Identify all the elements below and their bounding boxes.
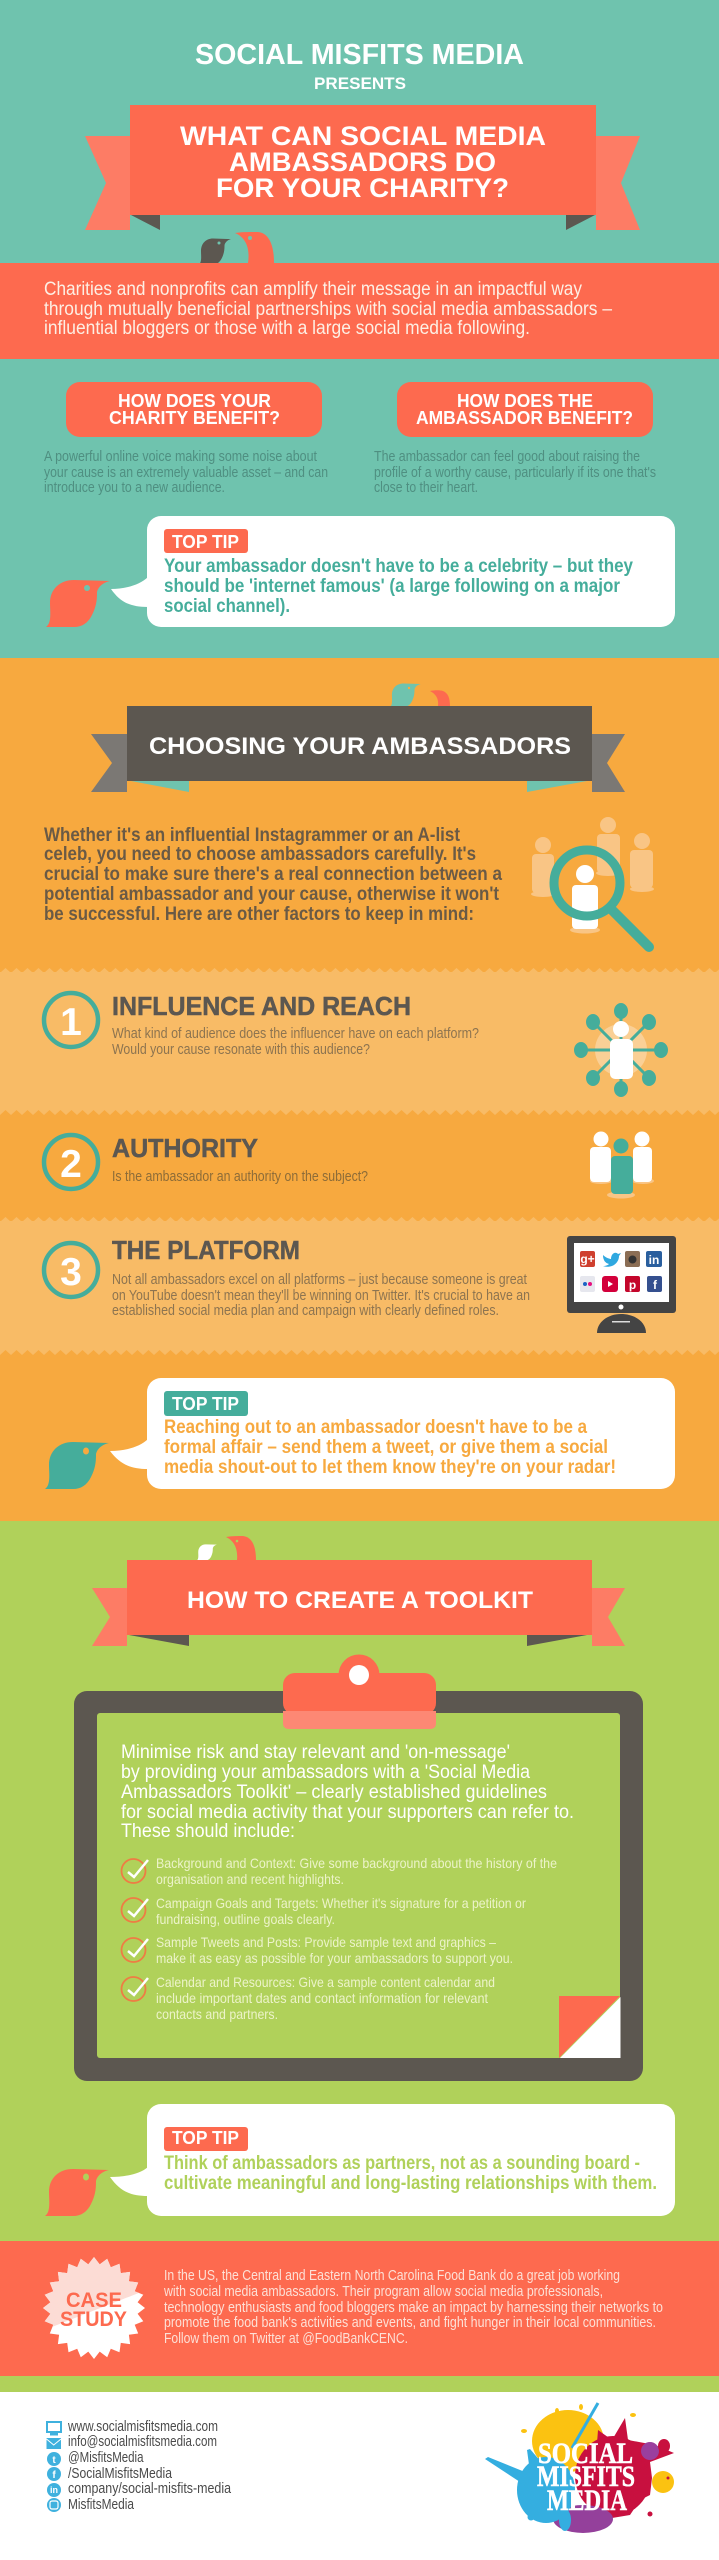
header brand name xyxy=(195,39,524,93)
icon: three people xyxy=(590,1132,654,1198)
text: the platform: established social media plan and campaign with clearly defined roles. xyxy=(112,1303,499,1319)
icon: perched birds xyxy=(199,232,274,264)
text: influence and reach xyxy=(112,1026,479,1058)
header brand name: PRESENTS xyxy=(314,74,406,93)
section ribbon: HOW TO CREATE A TOOLKIT xyxy=(187,1587,533,1614)
icon: social circles: t xyxy=(52,2455,56,2466)
text: authority: Is the ambassador an authority on the subject? xyxy=(112,1169,368,1185)
text block: toolkit intro: These should include: xyxy=(121,1821,295,1842)
icon: social circles: in xyxy=(50,2485,58,2495)
text block: toolkit intro xyxy=(121,1742,574,1842)
case study seal xyxy=(43,2257,145,2359)
text block: choosing intro: potential ambassador and your cause, otherwise it won't xyxy=(44,884,500,905)
contact list xyxy=(46,2419,232,2513)
text block: case study: In the US, the Central and Eastern North Carolina Food Bank do a great job working xyxy=(164,2268,620,2284)
checklist item: background and context: Background and Context: Give some background about the history of the xyxy=(156,1855,557,1871)
icon: monitor with social networks: p xyxy=(629,1278,636,1292)
checklist item: calendar and resources: contacts and partners. xyxy=(156,2006,278,2022)
panel: intro teal section xyxy=(0,0,719,658)
contact text: www.socialmisfitsmedia.com xyxy=(67,2419,218,2435)
row: influence and reach xyxy=(0,968,719,1115)
heading pill: charity benefit: CHARITY BENEFIT? xyxy=(109,408,280,428)
callout: top tip 3: cultivate meaningful and long-lasting relationships with them. xyxy=(164,2173,657,2194)
callout: top tip 3: TOP TIP xyxy=(172,2128,239,2148)
title ribbon xyxy=(85,105,640,230)
contact text: info@socialmisfitsmedia.com xyxy=(68,2434,217,2450)
icon: monitor with social networks: in xyxy=(649,1253,659,1267)
contact text: @MisfitsMedia xyxy=(68,2450,144,2466)
contact text xyxy=(67,2419,232,2513)
contact text: company/social-misfits-media xyxy=(68,2481,232,2497)
checklist item: calendar and resources: Calendar and Resources: Give a sample content calendar and xyxy=(156,1974,495,1990)
text block: choosing intro: celeb, you need to choose ambassadors carefully. It's xyxy=(44,844,476,865)
checklist item: sample tweets xyxy=(122,1934,513,1966)
contact text: /SocialMisfitsMedia xyxy=(68,2466,173,2482)
logo: social misfits media splat: MISFITS xyxy=(537,2460,635,2493)
icon: network person xyxy=(574,1003,668,1097)
callout: top tip 2: TOP TIP xyxy=(172,1394,239,1414)
text block: toolkit intro: Minimise risk and stay relevant and 'on-message' xyxy=(121,1742,510,1763)
checklist item: campaign goals: fundraising, outline goals clearly. xyxy=(156,1911,335,1927)
callout: top tip 3 xyxy=(45,2104,675,2216)
checklist item: campaign goals: Campaign Goals and Targets: Whether it's signature for a petition or xyxy=(156,1895,526,1911)
text block: ambassador benefit: profile of a worthy cause, particularly if its one that's xyxy=(374,465,656,481)
number badge 2 xyxy=(44,1135,98,1189)
text block: case study xyxy=(163,2268,663,2347)
callout: top tip 1: TOP TIP xyxy=(172,532,239,552)
callout: top tip 2: Reaching out to an ambassador doesn't have to be a xyxy=(164,1417,587,1438)
number badge 2: 2 xyxy=(60,1143,82,1186)
text block: ambassador benefit: The ambassador can feel good about raising the xyxy=(374,449,640,465)
number badge 3: 3 xyxy=(60,1251,82,1294)
icon: monitor xyxy=(47,2422,61,2436)
text block: toolkit intro: Ambassadors Toolkit' – clearly established guidelines xyxy=(121,1782,547,1803)
checklist item: sample tweets: Sample Tweets and Posts: Provide sample text and graphics – xyxy=(156,1934,496,1950)
number badge 1: 1 xyxy=(60,1001,82,1044)
callout: top tip 1 xyxy=(46,516,675,627)
checklist item: calendar and resources: include important dates and contact information for relevant xyxy=(156,1990,488,2006)
case study seal: STUDY xyxy=(60,2308,127,2331)
number badge 1 xyxy=(44,993,98,1047)
row: authority xyxy=(44,1132,654,1198)
text block: charity benefit xyxy=(44,449,328,496)
callout: top tip 2: formal affair – send them a tweet, or give them a social xyxy=(164,1437,608,1458)
page corner fold xyxy=(559,1996,620,2058)
panel: footer xyxy=(0,2392,719,2560)
contact text: MisfitsMedia xyxy=(68,2497,135,2513)
callout: top tip 1: social channel). xyxy=(164,596,290,617)
text: influence and reach: What kind of audience does the influencer have on each platform? xyxy=(112,1026,479,1042)
icon: monitor with social networks xyxy=(567,1236,676,1333)
icon: monitor with social networks: f xyxy=(653,1278,658,1292)
checklist item: background and context xyxy=(122,1855,557,1887)
case study seal: CASE xyxy=(66,2289,122,2312)
text block: case study: Follow them on Twitter at @FoodBankCENC. xyxy=(164,2331,408,2347)
heading pill: ambassador benefit xyxy=(397,382,653,437)
heading: authority: AUTHORITY xyxy=(112,1133,258,1163)
callout: top tip 2 xyxy=(45,1378,675,1489)
number badge 3 xyxy=(44,1243,98,1297)
text block: charity benefit: A powerful online voice making some noise about xyxy=(44,449,317,465)
text block: choosing intro xyxy=(44,825,502,925)
intro text band: through mutually beneficial partnerships with social media ambassadors – xyxy=(44,299,612,320)
checklist item: sample tweets: make it as easy as possible for your ambassadors to support you. xyxy=(156,1950,513,1966)
logo: social misfits media splat xyxy=(485,2403,674,2533)
logo: social misfits media splat: SOCIAL xyxy=(538,2437,633,2470)
icon: perched birds xyxy=(390,684,450,707)
callout: top tip 2: media shout-out to let them know they're on your radar! xyxy=(164,1457,616,1478)
text: the platform xyxy=(112,1272,530,1319)
intro text band xyxy=(0,263,719,359)
text: the platform: Not all ambassadors excel on all platforms – just because someone is great xyxy=(112,1272,527,1288)
logo: social misfits media splat: MEDIA xyxy=(547,2484,627,2517)
panel: choosing your ambassadors xyxy=(0,658,719,2560)
callout: top tip 1: Your ambassador doesn't have to be a celebrity – but they xyxy=(164,556,633,577)
clipboard xyxy=(74,1654,643,2081)
heading pill: charity benefit xyxy=(66,382,322,437)
section ribbon xyxy=(92,1560,625,1646)
row: the platform xyxy=(0,1217,719,1489)
section ribbon xyxy=(91,706,625,792)
text block: charity benefit: introduce you to a new audience. xyxy=(44,480,225,496)
panel: case study xyxy=(0,2241,719,2376)
title ribbon: WHAT CAN SOCIAL MEDIA xyxy=(180,121,546,151)
callout: top tip 3: Think of ambassadors as partners, not as a sounding board - xyxy=(164,2153,640,2174)
title ribbon: FOR YOUR CHARITY? xyxy=(216,173,509,203)
text block: choosing intro: crucial to make sure there's a real connection between a xyxy=(44,864,502,885)
icon: perched birds xyxy=(197,1536,256,1560)
text block: toolkit intro: by providing your ambassadors with a 'Social Media xyxy=(121,1762,530,1783)
checklist item: calendar and resources xyxy=(122,1974,495,2022)
text block: case study: with social media ambassadors. Their program allow social media professionals, xyxy=(163,2284,603,2300)
section ribbon: CHOOSING YOUR AMBASSADORS xyxy=(149,733,571,760)
text block: toolkit intro: for social media activity that your supporters can refer to. xyxy=(121,1802,574,1823)
text: influence and reach: Would your cause resonate with this audience? xyxy=(112,1042,370,1058)
heading: the platform: THE PLATFORM xyxy=(112,1235,300,1265)
icon: magnifier over people xyxy=(531,817,654,947)
icon: social circles: f xyxy=(52,2470,56,2481)
heading pill: ambassador benefit: HOW DOES THE xyxy=(457,391,593,411)
heading pill: charity benefit: HOW DOES YOUR xyxy=(118,391,271,411)
checklist item: background and context: organisation and recent highlights. xyxy=(156,1871,344,1887)
text block: ambassador benefit xyxy=(374,449,656,496)
title ribbon: AMBASSADORS DO xyxy=(229,147,496,177)
heading pill: ambassador benefit: AMBASSADOR BENEFIT? xyxy=(416,408,633,428)
green strip xyxy=(0,2376,719,2392)
text block: choosing intro: Whether it's an influential Instagrammer or an A-list xyxy=(44,825,461,846)
text block: choosing intro: be successful. Here are other factors to keep in mind: xyxy=(44,904,474,925)
text: the platform: on YouTube doesn't mean they'll be winning on Twitter. It's crucial to have an xyxy=(112,1288,530,1304)
callout: top tip 1: should be 'internet famous' (a large following on a major xyxy=(164,576,621,597)
intro text band: influential bloggers or those with a large social media following. xyxy=(44,318,530,339)
icon: envelope xyxy=(46,2438,61,2449)
intro text band: Charities and nonprofits can amplify their message in an impactful way xyxy=(44,279,582,300)
text block: ambassador benefit: close to their heart. xyxy=(374,480,478,496)
icon: monitor with social networks: g+ xyxy=(580,1252,595,1266)
text block: charity benefit: your cause is an extremely valuable asset – and can xyxy=(44,465,328,481)
icon: social circles xyxy=(47,2452,61,2512)
checklist item: campaign goals xyxy=(122,1895,526,1927)
header brand name: SOCIAL MISFITS MEDIA xyxy=(195,39,524,71)
clipboard clip xyxy=(283,1654,436,1729)
panel: how to create a toolkit xyxy=(0,1521,719,2241)
heading: influence and reach: INFLUENCE AND REACH xyxy=(112,991,411,1021)
